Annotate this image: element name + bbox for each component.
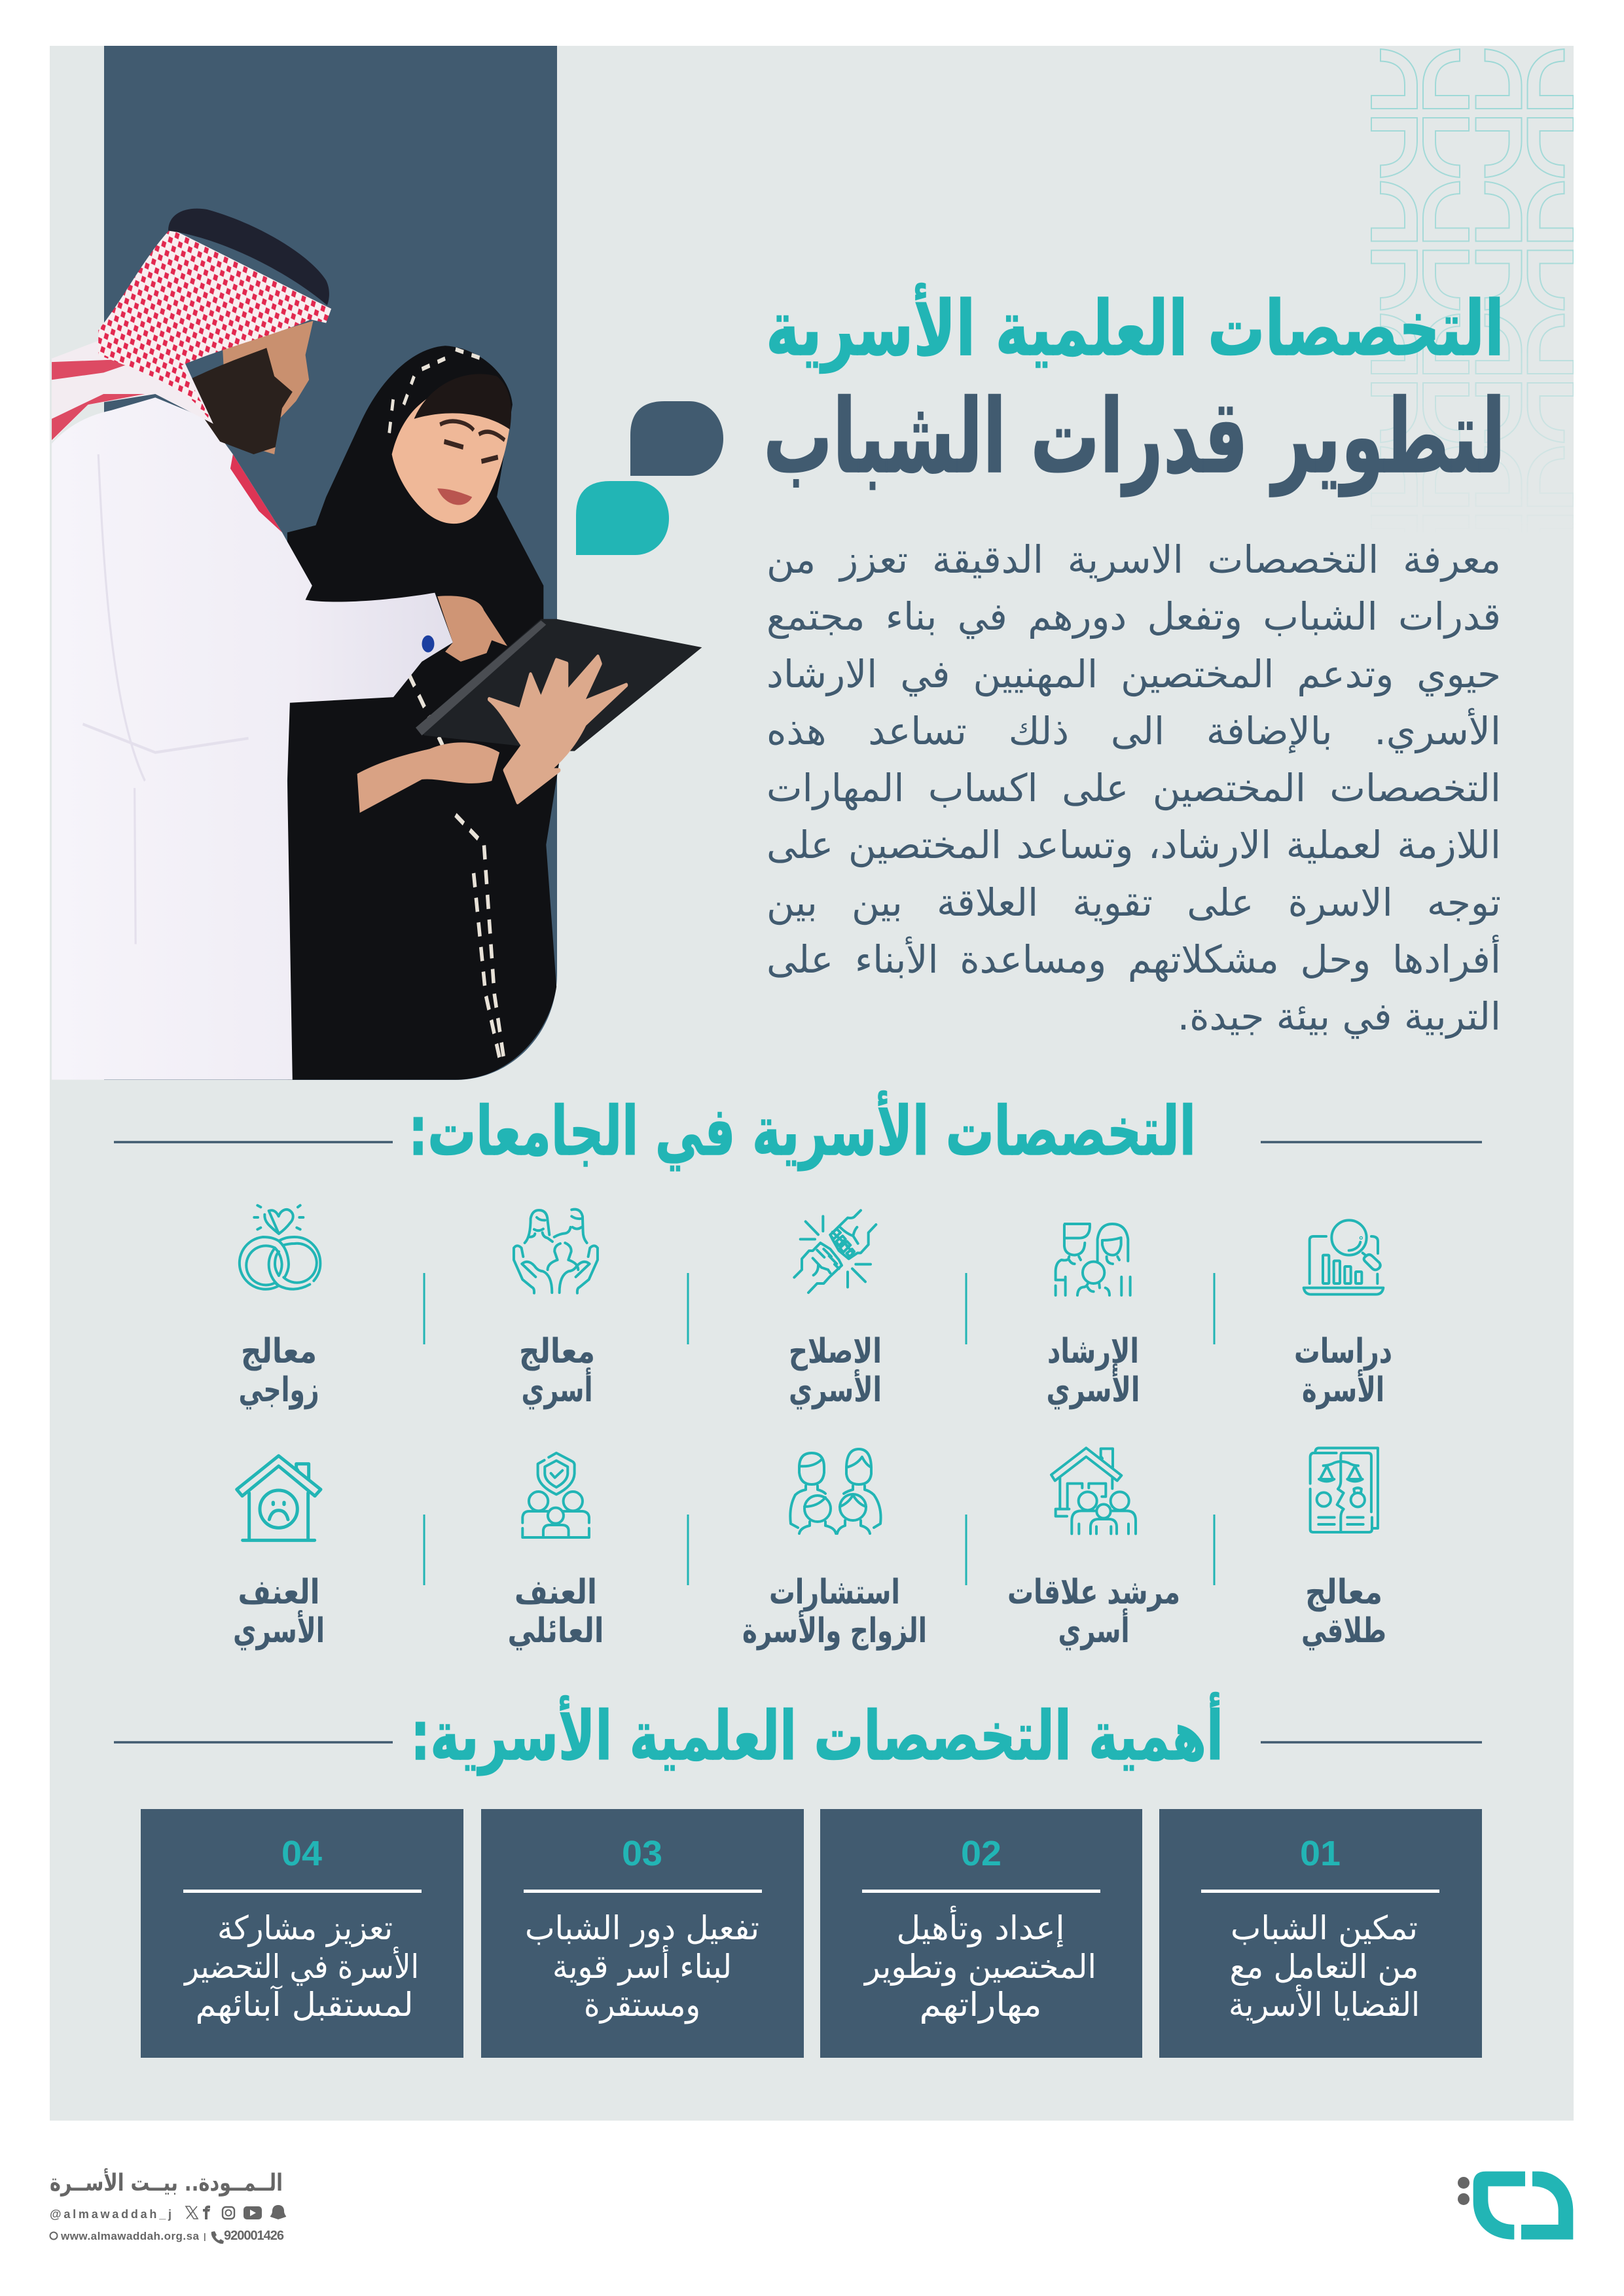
label: domestic violence <box>508 1573 604 1651</box>
title <box>763 283 1506 497</box>
label: relationship counsellor: مرشد علاقات <box>1007 1573 1180 1612</box>
label: family therapist: أسري <box>521 1367 593 1410</box>
footer: contact block: الــمــودة.. بيــت الأســرة <box>50 2168 283 2197</box>
label: divorce therapist <box>1301 1573 1386 1651</box>
text block: introduction paragraph: اللازمة لعملية الارشاد، وتساعد المختصين على <box>767 823 1501 867</box>
label: marriage and family consultations: الزواج والأسرة <box>742 1609 927 1651</box>
label: divorce therapist: طلاقي <box>1301 1611 1386 1651</box>
label: relationship counsellor <box>1007 1573 1180 1651</box>
card 01: 01 <box>1300 1834 1341 1873</box>
cards: importance <box>141 1809 1482 2058</box>
card 02 <box>820 1809 1142 2058</box>
icons: social media <box>50 2205 286 2244</box>
label: family studies: الأسرة <box>1302 1369 1384 1410</box>
card 04: 04 <box>281 1834 322 1873</box>
card 02: المختصين وتطوير <box>863 1948 1096 1986</box>
man figure <box>52 209 507 1080</box>
text block: introduction paragraph: حيوي وتدعم المختصين المهنيين في الارشاد <box>767 652 1501 696</box>
icon: fist bump <box>794 1210 876 1293</box>
label: family reform <box>789 1332 882 1410</box>
label: family violence: الأسري <box>233 1609 325 1651</box>
label: marriage and family consultations <box>742 1573 927 1651</box>
label: marriage and family consultations: استشارات <box>769 1573 900 1612</box>
card 04: الأسرة في التحضير <box>183 1946 419 1986</box>
heading: specializations in universities: التخصصات الأسرية في الجامعات: <box>408 1091 1196 1171</box>
text block: introduction paragraph: معرفة التخصصات الاسرية الدقيقة تعزز من <box>767 537 1501 582</box>
card 03: ومستقرة <box>584 1986 700 2024</box>
footer: contact block: 920001426 <box>224 2229 284 2243</box>
label: family therapist <box>519 1332 595 1410</box>
icon: family in hands <box>514 1210 598 1293</box>
label: relationship counsellor: أسري <box>1058 1608 1130 1651</box>
card 01: من التعامل مع <box>1229 1948 1419 1986</box>
logo <box>1458 2172 1573 2240</box>
label: family reform: الاصلاح <box>789 1332 882 1371</box>
tablet <box>416 619 702 751</box>
text block: introduction paragraph: الأسري. بالإضافة الى ذلك تساعد هذه <box>767 709 1501 753</box>
label: divorce therapist: معالج <box>1305 1573 1382 1612</box>
footer: contact block: www.almawaddah.org.sa <box>60 2230 200 2242</box>
label: family violence <box>233 1573 325 1651</box>
grid: specializations <box>233 1206 1392 1651</box>
card 02: إعداد وتأهيل <box>897 1905 1064 1948</box>
label: family studies: دراسات <box>1294 1332 1392 1371</box>
text block: introduction paragraph: توجه الاسرة على تقوية العلاقة بين بين <box>767 880 1501 925</box>
photo: man and woman with tablet <box>52 209 702 1080</box>
card 04: لمستقبل آبنائهم <box>195 1985 414 2024</box>
label: marital therapist <box>238 1332 319 1410</box>
text block: introduction paragraph: التخصصات المختصين على اكساب المهارات <box>767 766 1501 810</box>
label: family studies <box>1294 1332 1392 1410</box>
icon: divorce law book <box>1310 1448 1378 1532</box>
text block: introduction paragraph: أفرادها وحل مشكلاتهم ومساعدة الأبناء على <box>767 937 1501 982</box>
label: family guidance <box>1046 1332 1140 1410</box>
label: marital therapist: معالج <box>241 1332 317 1371</box>
panel: navy photo backdrop <box>104 46 557 1080</box>
card 01 <box>1159 1809 1482 2058</box>
footer: contact block <box>50 2168 286 2244</box>
label: family guidance: الإرشاد <box>1047 1332 1139 1371</box>
icon: family counselling <box>1056 1224 1130 1295</box>
woman hand on tablet <box>489 656 626 802</box>
card 01: تمكين الشباب <box>1231 1909 1418 1947</box>
label: domestic violence: العائلي <box>508 1611 604 1651</box>
card 02: مهاراتهم <box>919 1986 1042 2024</box>
icon: family faces <box>790 1449 881 1534</box>
footer: contact block: @almawaddah_j <box>50 2208 171 2221</box>
icon: chart and magnifier <box>1304 1220 1383 1295</box>
icon: house and family <box>1051 1448 1136 1534</box>
card 03: 03 <box>622 1834 662 1873</box>
card 04 <box>141 1809 463 2058</box>
label: family guidance: الأسري <box>1046 1369 1140 1410</box>
woman figure <box>287 346 559 1080</box>
heading: importance: أهمية التخصصات العلمية الأسرية: <box>410 1692 1223 1776</box>
card 03 <box>481 1809 804 2058</box>
label: family reform: الأسري <box>789 1369 882 1410</box>
text block: introduction paragraph: قدرات الشباب وتفعل دورهم في بناء مجتمع <box>767 594 1501 639</box>
label: family violence: العنف <box>238 1573 319 1612</box>
text block: introduction paragraph <box>767 537 1501 1039</box>
label: domestic violence: العنف <box>514 1573 597 1612</box>
icon: wedding rings <box>240 1206 320 1289</box>
card 04: تعزيز مشاركة <box>217 1909 393 1947</box>
icon: sad house <box>237 1456 321 1540</box>
decorative pattern: top right lattice <box>1371 48 1574 533</box>
card 01: القضايا الأسرية <box>1229 1984 1420 2024</box>
label: family therapist: معالج <box>519 1332 595 1371</box>
text block: introduction paragraph: التربية في بيئة جيدة. <box>1178 994 1501 1039</box>
icon: speech bubbles <box>576 401 723 555</box>
label: marital therapist: زواجي <box>238 1371 319 1410</box>
card 03: تفعيل دور الشباب <box>525 1909 759 1948</box>
card 02: 02 <box>961 1834 1001 1873</box>
card 03: لبناء أسر قوية <box>552 1945 732 1986</box>
icon: shield and family <box>522 1453 589 1537</box>
